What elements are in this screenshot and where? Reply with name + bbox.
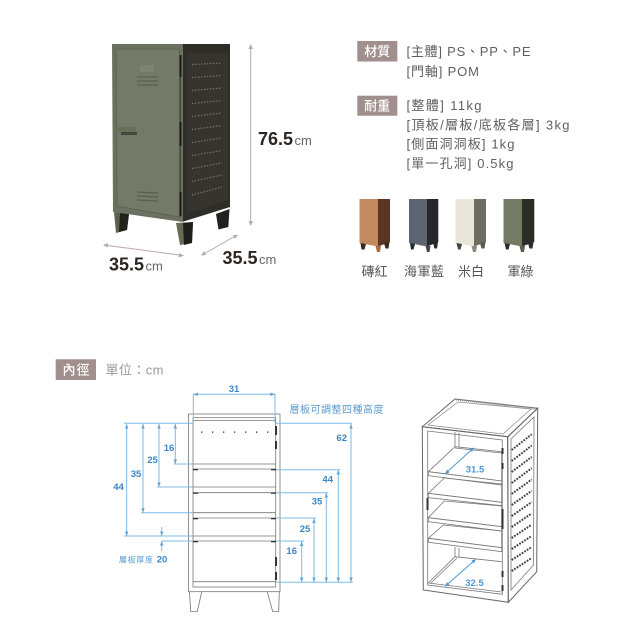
- text block: load capacity details: [側面洞洞板] 1kg: [406, 136, 514, 151]
- dimension: base depth 32.5: [445, 559, 484, 589]
- heading: inner dimensions: [56, 359, 96, 380]
- dimensions: left shelf heights: 25: [147, 455, 158, 466]
- dimension: width 31: 31: [229, 384, 240, 395]
- dimensions: right shelf heights: 62: [336, 433, 347, 444]
- text block: material details: [406, 44, 531, 79]
- colour names: 米白: [458, 264, 484, 279]
- dimensions: left shelf heights: [113, 423, 193, 536]
- tag: material: 材質: [364, 44, 390, 59]
- text block: material details: [主體] PS、PP、PE: [406, 44, 531, 59]
- heading: inner dimensions: 內徑: [62, 362, 90, 378]
- arrow: height dimension: [248, 44, 253, 226]
- unit label: 單位：cm: [106, 362, 164, 378]
- text block: load capacity details: [406, 98, 570, 171]
- arrow: depth dimension: [201, 235, 238, 256]
- text block: load capacity details: [單一孔洞] 0.5kg: [406, 156, 514, 171]
- dimensions: left shelf heights: 35: [131, 469, 142, 480]
- colour names: 軍綠: [508, 264, 534, 279]
- dimensions: right shelf heights: 35: [312, 497, 323, 508]
- dimensions: right shelf heights: 16: [286, 546, 297, 557]
- dimensions: right shelf heights: [276, 423, 353, 582]
- note: four adjustable shelf heights: 層板可調整四種高度: [290, 403, 384, 416]
- colour swatch: army green: [504, 199, 534, 252]
- dimension: base depth 32.5: 32.5: [465, 578, 484, 589]
- dimensions: left shelf heights: 44: [113, 482, 124, 493]
- dimension: shelf thickness 20: [119, 527, 193, 566]
- colour names: 海軍藍: [404, 264, 444, 279]
- label: height 76.5cm: 76.5cm: [258, 129, 312, 149]
- technical drawing: front elevation: [188, 414, 280, 612]
- dimensions: right shelf heights: 25: [300, 524, 311, 535]
- colour names: 磚紅: [362, 264, 388, 279]
- colour swatch: off white: [456, 199, 486, 252]
- colour names: [362, 264, 534, 279]
- colour swatch: navy: [409, 199, 438, 252]
- dimensions: right shelf heights: 44: [322, 475, 334, 486]
- colour swatch: brick red: [360, 199, 390, 252]
- tag: load capacity: 耐重: [364, 98, 390, 114]
- tag: material: [357, 41, 397, 62]
- tag: load capacity: [357, 96, 397, 116]
- dimension: width 31: [193, 384, 275, 423]
- dimensions: left shelf heights: 16: [164, 443, 174, 454]
- arrow: width dimension: [103, 243, 184, 258]
- label: width 35.5cm: 35.5cm: [109, 254, 163, 274]
- dimension: shelf depth 31.5: 31.5: [466, 464, 485, 476]
- dimension: shelf thickness 20: 層板厚度: [119, 554, 153, 564]
- text block: material details: [門軸] POM: [406, 64, 479, 79]
- text block: load capacity details: [整體] 11kg: [406, 98, 482, 113]
- dimension: shelf thickness 20: 20: [157, 554, 167, 566]
- text block: load capacity details: [頂板/層板/底板各層] 3kg: [406, 117, 570, 132]
- product photo: green cabinet: [112, 44, 230, 245]
- dimension: shelf depth 31.5: [445, 448, 485, 476]
- technical drawing: 3D open cabinet: [422, 399, 538, 602]
- label: depth 35.5cm: 35.5cm: [222, 248, 276, 268]
